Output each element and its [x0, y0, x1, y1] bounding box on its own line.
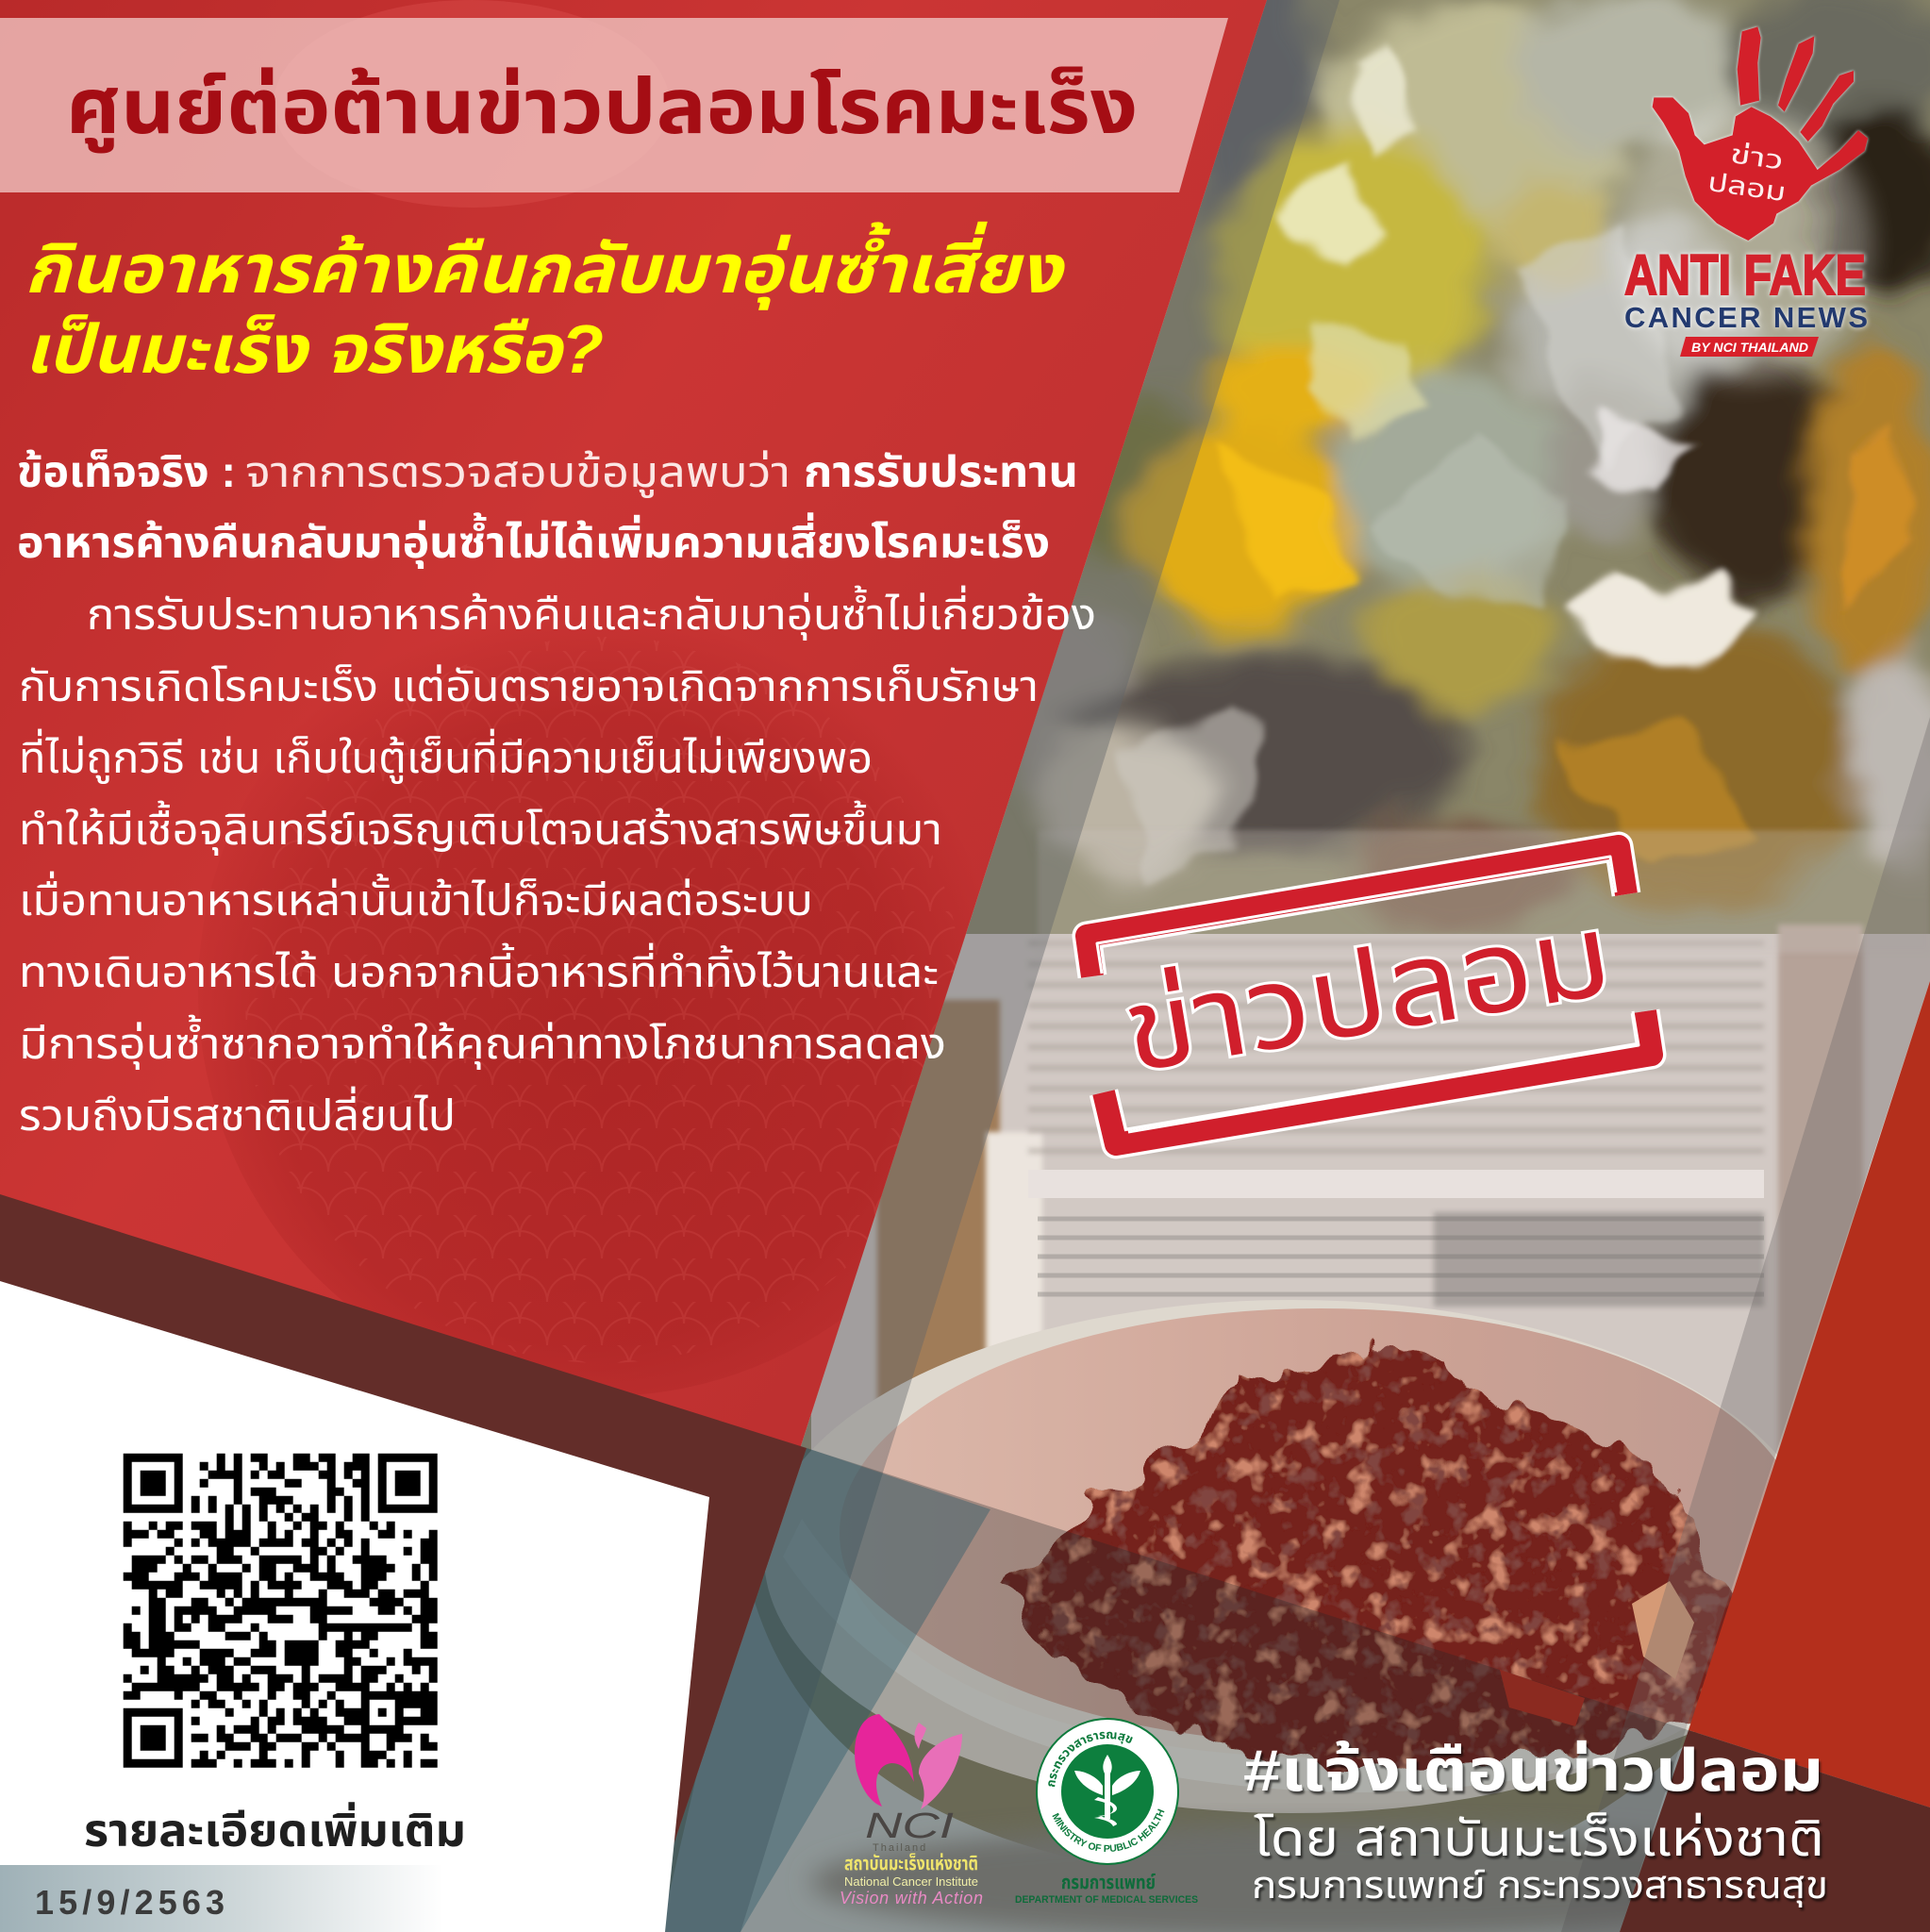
NCI Thai name: สถาบันมะเร็งแห่งชาติ: [844, 1853, 978, 1874]
title: ศูนย์ต่อต้านข่าวปลอมโรคมะเร็ง: [66, 64, 1138, 154]
body text: มีการอุ่นซ้ำซากอาจทำให้คุณค่าทางโภชนาการลดลง: [19, 1014, 946, 1070]
NCI English name: National Cancer Institute: [844, 1874, 978, 1889]
stamp bottom bracket: [1104, 1011, 1652, 1144]
BY NCI THAILAND tag: [1680, 337, 1819, 357]
body text: การรับประทานอาหารค้างคืนและกลับมาอุ่นซ้ำไม่เกี่ยวข้อง: [87, 585, 1096, 641]
translucent grey strip left: [644, 0, 1339, 1932]
photo: window blinds and curtains: [811, 830, 1930, 1538]
photo: bowl: [660, 1300, 1930, 1932]
body text: รวมถึงมีรสชาติเปลี่ยนไป: [19, 1086, 456, 1140]
icon: red hand print: [1653, 26, 1868, 241]
icon: red hand print: ปลอม: [1706, 167, 1788, 207]
dark overlay across lower photo: [644, 1448, 1930, 1932]
headline question: กินอาหารค้างคืนกลับมาอุ่นซ้ำเสี่ยง: [25, 222, 1065, 310]
CANCER NEWS wordmark: CANCER NEWS: [1624, 301, 1868, 334]
logo: Anti Fake Cancer News: [1618, 26, 1872, 382]
photo: leftover food in plastic bags, window and bowl: [566, 0, 1930, 1932]
department name: กรมการแพทย์: [1061, 1873, 1156, 1893]
icon: red hand print: ข่าว: [1728, 139, 1786, 175]
body text: ที่ไม่ถูกวิธี เช่น เก็บในตู้เย็นที่มีความเย็นไม่เพียงพอ: [19, 728, 873, 784]
Thailand label: Thailand: [873, 1842, 927, 1854]
ANTI FAKE wordmark: ANTI FAKE: [1624, 243, 1866, 307]
icon: pink heart butterfly: [855, 1714, 962, 1809]
bright cell background top: [361, 0, 582, 208]
department name: DEPARTMENT OF MEDICAL SERVICES: [1015, 1894, 1198, 1906]
photo: plastic bags of curry: [1000, 0, 1930, 934]
footer: fake news alert text: #แจ้งเตือนข่าวปลอม: [1243, 1739, 1823, 1804]
footer: fake news alert text: โดย สถาบันมะเร็งแห่งชาติ: [1254, 1810, 1824, 1867]
date band background: [0, 1865, 443, 1932]
logo glow: [1618, 108, 1872, 382]
NCI slogan: Vision with Action: [840, 1889, 983, 1907]
body text: ข้อเท็จจริง :: [17, 447, 236, 496]
date: 15/9/2563: [35, 1883, 225, 1922]
teal tint in lower strip: [644, 1448, 990, 1932]
QR code: [124, 1457, 438, 1763]
right red panel: [1689, 981, 1930, 1807]
NCI script mark: NCI: [865, 1807, 955, 1846]
dark band below left panel: [0, 1194, 807, 1932]
left red panel: [0, 0, 1267, 1932]
body text: เมื่อทานอาหารเหล่านั้นเข้าไปก็จะมีผลต่อระบบ: [19, 871, 813, 924]
tumor cell texture: [215, 660, 957, 1389]
stamp word: ข่าวปลอม: [1115, 890, 1620, 1096]
icon: caduceus: [1074, 1755, 1140, 1826]
department name: [1015, 1873, 1198, 1906]
body text: การรับประทาน: [804, 447, 1078, 496]
footer: fake news alert text: กรมการแพทย์ กระทรวงสาธารณสุข: [1252, 1865, 1828, 1907]
body text: จากการตรวจสอบข้อมูลพบว่า: [245, 447, 790, 498]
logo: Ministry of Public Health seal: [1036, 1718, 1179, 1865]
logo: Ministry of Public Health seal: MINISTRY OF PUBLIC HEALTH: [1053, 1808, 1164, 1852]
photo: minced meat in bowl: [1000, 1349, 1755, 1764]
header band: [0, 18, 1228, 192]
QR caption: รายละเอียดเพิ่มเติม: [84, 1802, 466, 1857]
logo: Ministry of Public Health seal: กระทรวงสาธารณสุข: [1048, 1732, 1133, 1787]
body text: [17, 447, 1096, 1140]
body text: ทำให้มีเชื้อจุลินทรีย์เจริญเติบโตจนสร้างสารพิษขึ้นมา: [19, 800, 942, 856]
BY NCI THAILAND tag: BY NCI THAILAND: [1691, 340, 1808, 355]
headline question: เป็นมะเร็ง จริงหรือ?: [25, 312, 604, 388]
right dark red panel: [1620, 1730, 1930, 1932]
logo: National Cancer Institute: [840, 1714, 983, 1907]
body text: ทางเดินอาหารได้ นอกจากนี้อาหารที่ทำทิ้งไว้นานและ: [19, 942, 939, 996]
white QR panel: [0, 1281, 709, 1932]
footer: fake news alert text: [1243, 1739, 1828, 1907]
headline question: [25, 222, 1065, 388]
stamp top bracket: [1087, 846, 1626, 976]
body text: อาหารค้างคืนกลับมาอุ่นซ้ำไม่ได้เพิ่มความเสี่ยงโรคมะเร็ง: [17, 512, 1050, 569]
translucent grey strip right: [1561, 717, 1930, 1932]
stamp: fake news: [1087, 846, 1652, 1144]
body text: กับการเกิดโรคมะเร็ง แต่อันตรายอาจเกิดจากการเก็บรักษา: [19, 661, 1039, 710]
